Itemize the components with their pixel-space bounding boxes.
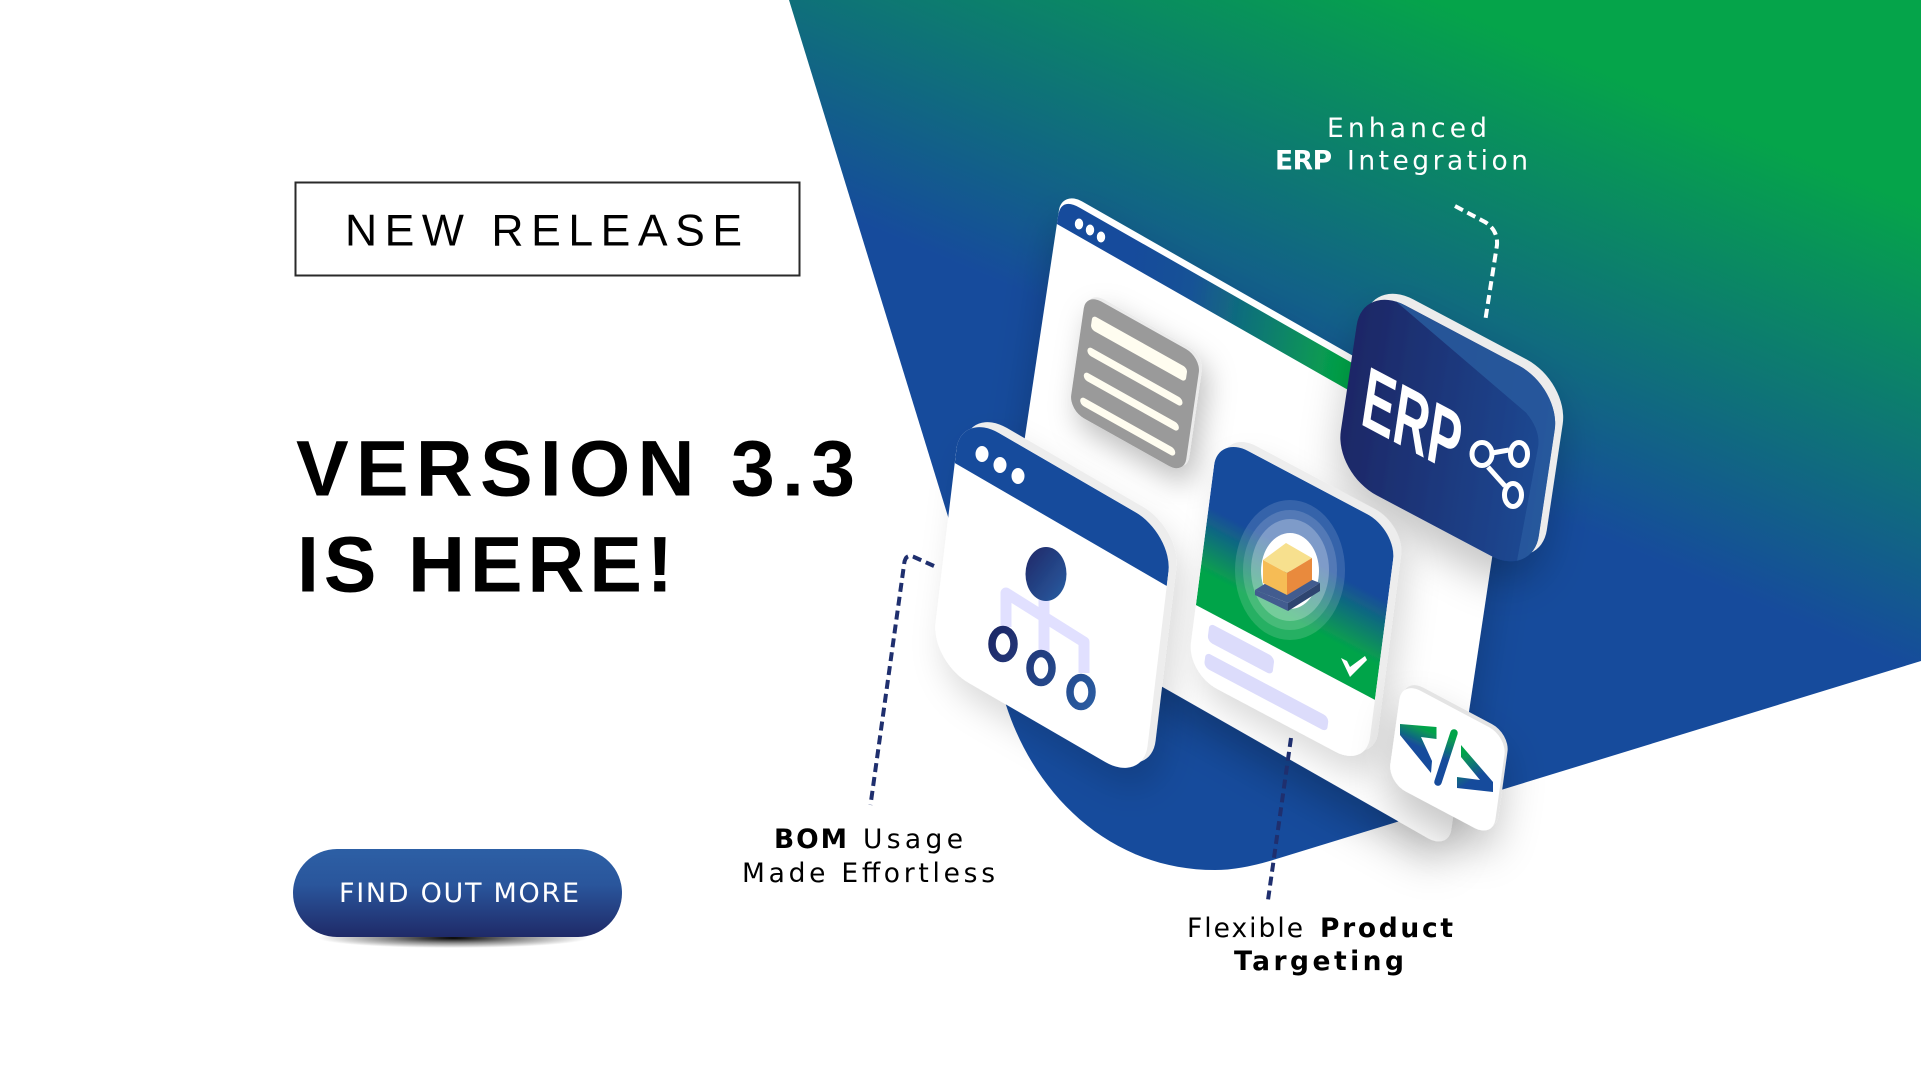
label: BOM usage made effortless: BOM [774,824,847,855]
icon: org tree [992,547,1092,706]
icon: share nodes [1472,442,1528,506]
card: ERP: ERP [1356,348,1468,494]
gradient background shape [789,0,1921,870]
button: find out more: FIND OUT MORE [339,878,579,909]
dashed connector: ERP [1455,206,1497,322]
label: flexible product targeting: Flexible [1187,913,1303,944]
card: BOM [931,406,1181,784]
icon: document list card [1069,291,1204,474]
label: BOM usage made effortless [742,824,995,889]
icon: product cube [1255,543,1320,611]
label: enhanced ERP integration: Integration [1347,146,1528,176]
icon: code brackets [1400,724,1493,792]
label: flexible product targeting: Targeting [1234,946,1404,977]
dashed connector: BOM [870,556,934,805]
icon: concentric glow [1235,500,1345,640]
icon: check mark [1341,656,1367,677]
heading: version 3.3 is here: IS HERE! [297,520,673,608]
label: enhanced ERP integration [1275,113,1528,176]
badge: new release [296,182,800,276]
heading: version 3.3 is here [296,424,855,608]
label: BOM usage made effortless: Made Effortless [742,858,995,889]
main browser window [1001,190,1509,850]
label: enhanced ERP integration: Enhanced [1327,113,1487,144]
button: find out more [293,849,622,948]
card: product targeting [1187,430,1405,768]
label: flexible product targeting: Product [1320,913,1453,944]
card: ERP [1334,277,1569,578]
label: BOM usage made effortless: Usage [863,824,963,855]
card: code [1388,678,1510,838]
badge: new release: NEW RELEASE [345,206,742,256]
label: enhanced ERP integration: ERP [1275,146,1332,176]
dashed connector: product [1268,738,1291,900]
heading: version 3.3 is here: VERSION 3.3 [296,424,855,512]
label: flexible product targeting [1187,913,1453,977]
